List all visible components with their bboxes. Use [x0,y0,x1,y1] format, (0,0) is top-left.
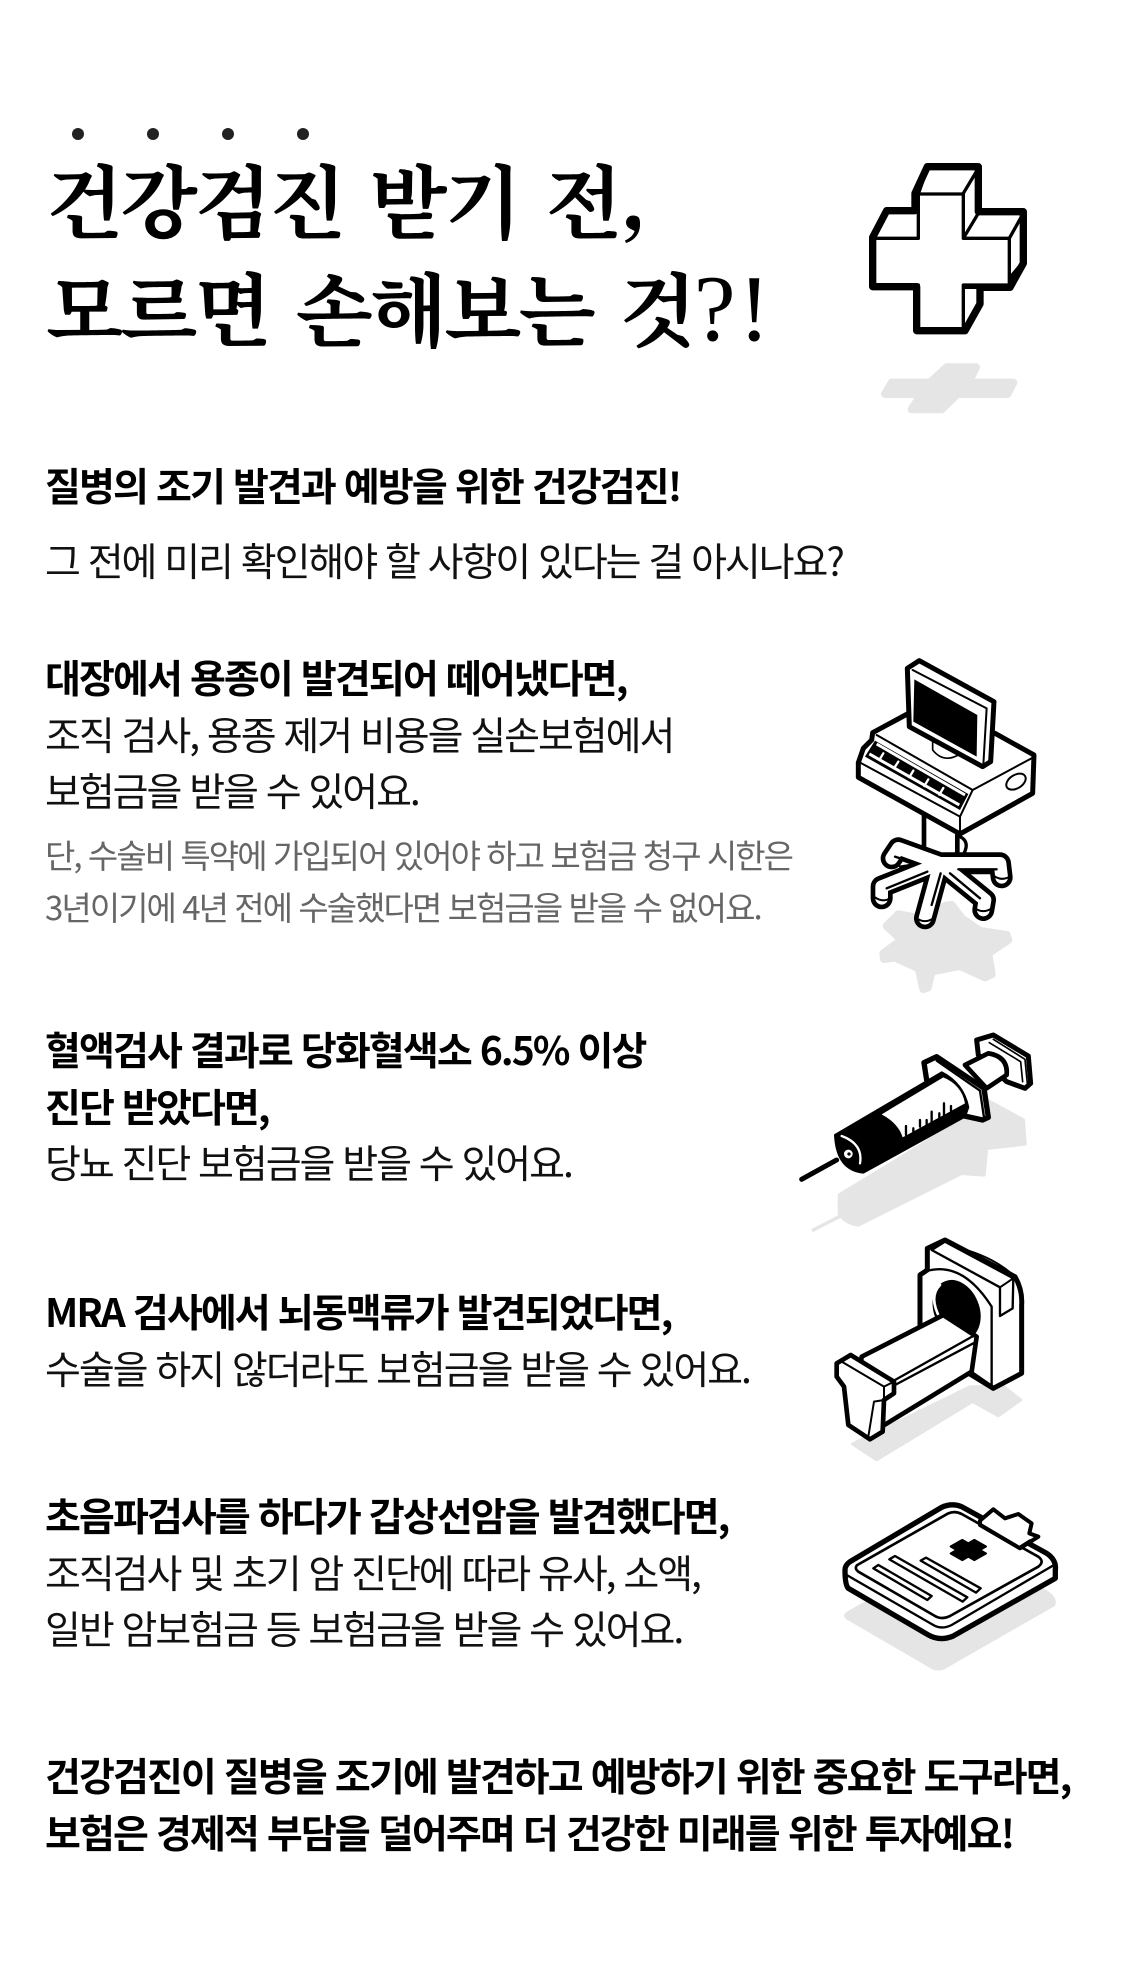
scanner gantry [920,1240,1022,1388]
intro text: 질병의 조기 발견과 예방을 위한 건강검진! [45,457,680,513]
cart console [858,714,1034,834]
clipboard clip [980,1509,1038,1548]
item: blood test: 당뇨 진단 보험금을 받을 수 있어요. [45,1134,572,1190]
item: blood test: 진단 받았다면, [45,1078,269,1134]
icon: MRI scanner [837,1240,1022,1460]
intro text [45,457,843,588]
cart legs [875,848,1011,921]
cart shadow [883,905,1008,989]
item: ultrasound: 초음파검사를 하다가 갑상선암을 발견했다면, [45,1487,728,1543]
icon: monitor cart [858,661,1034,989]
clipboard cross [951,1540,986,1560]
conclusion: 보험은 경제적 부담을 덜어주며 더 건강한 미래를 위한 투자예요! [45,1804,1013,1860]
syringe plunger head [977,1035,1031,1088]
clipboard lines [873,1556,981,1602]
icon: syringe [802,1035,1031,1230]
item: MRA [45,1283,750,1396]
title: 모르면 손해보는 것?! [46,248,773,363]
item: blood test [45,1021,646,1190]
scanner base [837,1355,894,1439]
item: colon polyp: 보험금을 받을 수 있어요. [45,762,419,818]
item: ultrasound: 일반 암보험금 등 보험금을 받을 수 있어요. [45,1600,682,1656]
cart stand [924,813,957,860]
cart monitor [933,740,958,758]
icon: clipboard [845,1505,1055,1669]
item: MRA: 수술을 하지 않더라도 보험금을 받을 수 있어요. [45,1340,750,1396]
scanner table [860,1315,977,1427]
item: MRA: MRA 검사에서 뇌동맥류가 발견되었다면, [45,1283,671,1339]
item: ultrasound: 조직검사 및 초기 암 진단에 따라 유사, 소액, [45,1544,700,1600]
intro text: 그 전에 미리 확인해야 할 사항이 있다는 걸 아시나요? [45,532,843,588]
title: 건강검진 받기 전, [46,140,644,255]
syringe plunger rod [965,1053,1007,1088]
icon: medical cross [873,167,1023,409]
item: ultrasound [45,1487,728,1656]
item: colon polyp [45,649,792,930]
syringe flange [924,1057,988,1120]
item: colon polyp: 3년이기에 4년 전에 수술했다면 보험금을 받을 수 없어요. [45,882,761,930]
clipboard board [845,1505,1055,1639]
item: colon polyp: 대장에서 용종이 발견되어 떼어냈다면, [45,649,627,705]
conclusion [45,1747,1070,1860]
scanner shadow [852,1386,1021,1460]
item: colon polyp: 단, 수술비 특약에 가입되어 있어야 하고 보험금 청구 시한은 [45,830,792,878]
title [46,140,773,363]
item: blood test: 혈액검사 결과로 당화혈색소 6.5% 이상 [45,1021,646,1077]
item: colon polyp: 조직 검사, 용종 제거 비용을 실손보험에서 [45,706,673,762]
conclusion: 건강검진이 질병을 조기에 발견하고 예방하기 위한 중요한 도구라면, [45,1747,1070,1803]
syringe shadow [839,1100,1025,1225]
emphasis dots [72,128,309,140]
syringe barrel [835,1072,968,1173]
clipboard shadow [845,1567,1054,1669]
